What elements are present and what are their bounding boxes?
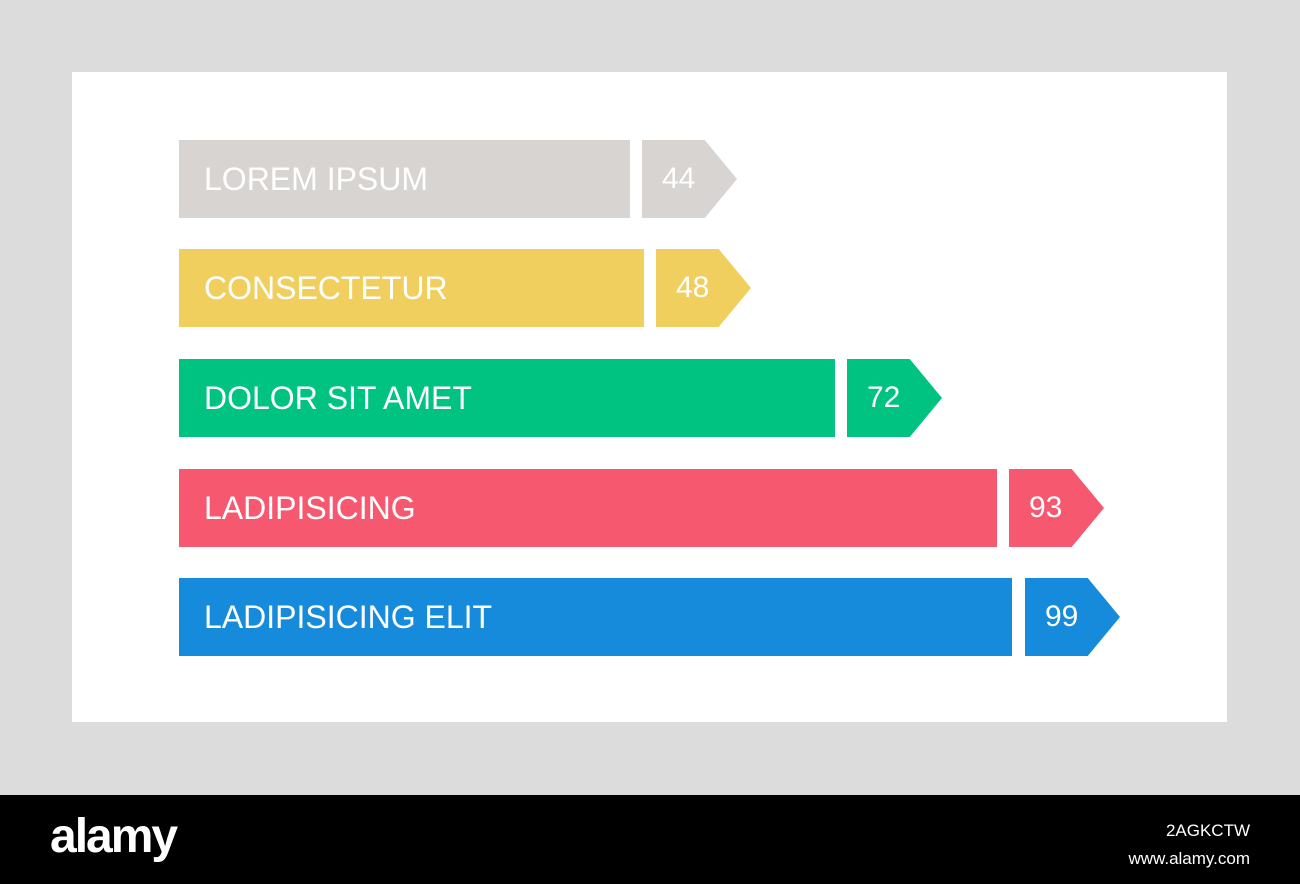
footer id text: www.alamy.com	[1128, 849, 1250, 868]
bar row: consectetur 48	[179, 249, 751, 327]
value arrow: 44	[642, 140, 737, 218]
bar row: dolor sit amet 72	[179, 359, 942, 437]
value arrow: 99: 99	[1045, 600, 1078, 633]
value arrow: 48	[656, 249, 751, 327]
value arrow: 93: 93	[1029, 491, 1062, 524]
value arrow: 93	[1009, 469, 1104, 547]
footer id text: 2AGKCTW	[1166, 821, 1250, 840]
bar row: lorem ipsum 44	[179, 140, 737, 218]
bar label: CONSECTETUR	[204, 270, 448, 306]
value arrow: 72: 72	[867, 381, 900, 414]
bar label	[179, 359, 835, 437]
value arrow: 44: 44	[662, 162, 695, 195]
panel: chart card	[72, 72, 1227, 722]
bar label	[179, 578, 1012, 656]
bar row: ladipisicing elit 99	[179, 578, 1120, 656]
bar label	[179, 140, 630, 218]
value arrow: 99	[1025, 578, 1120, 656]
bar label	[179, 469, 997, 547]
footer logo: alamy	[50, 810, 176, 863]
bar label: LADIPISICING	[204, 490, 416, 526]
bar label: LADIPISICING ELIT	[204, 599, 492, 635]
footer bar	[0, 795, 1300, 884]
bar label: LOREM IPSUM	[204, 161, 428, 197]
footer id text	[1128, 821, 1250, 868]
bar label	[179, 249, 644, 327]
value arrow: 72	[847, 359, 942, 437]
bar row: ladipisicing 93	[179, 469, 1104, 547]
value arrow: 48: 48	[676, 271, 709, 304]
bar label: DOLOR SIT AMET	[204, 380, 472, 416]
